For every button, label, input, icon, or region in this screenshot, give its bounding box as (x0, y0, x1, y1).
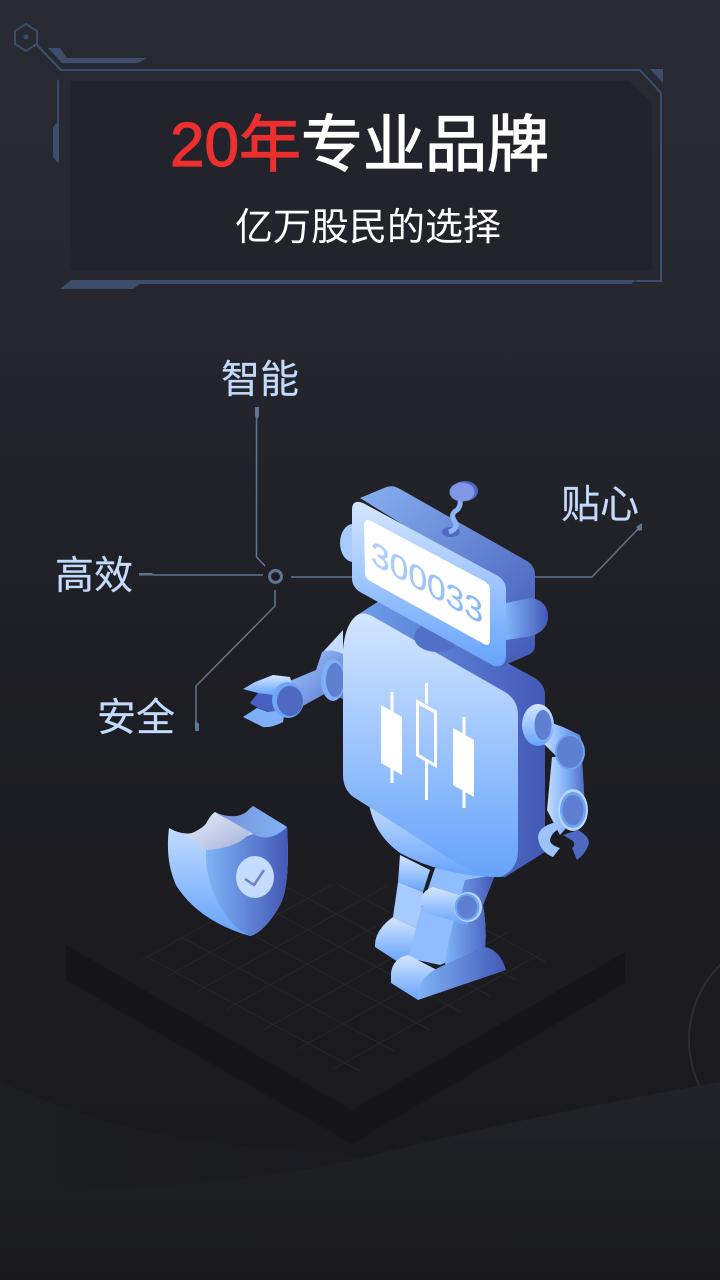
back leg (393, 882, 423, 930)
shield icon (168, 806, 288, 936)
frame corner accents (48, 48, 663, 289)
body side (356, 597, 545, 877)
label: safe: 安全 (97, 697, 175, 740)
shield check badge (236, 856, 274, 898)
neck (414, 622, 460, 652)
connector lines (139, 407, 642, 731)
label: efficient: 高效 (55, 555, 133, 598)
body front (343, 614, 518, 877)
belly (368, 790, 495, 877)
label: intelligent: 智能 (221, 359, 299, 402)
screen number: 300033 (371, 533, 483, 632)
head screen (364, 520, 490, 645)
head front (352, 502, 506, 666)
decorative circle arc (689, 934, 720, 1146)
frame inner panel (70, 81, 652, 270)
subtitle: 亿万股民的选择 (235, 207, 501, 249)
left ear (340, 524, 366, 562)
right arm (522, 704, 589, 860)
label: caring: 贴心 (561, 484, 639, 527)
hexagon icon (15, 24, 37, 51)
platform grid (142, 885, 546, 1071)
legs (375, 855, 506, 1000)
connector hub (270, 570, 282, 582)
title: 20年专业品牌 (170, 111, 549, 180)
antenna (442, 481, 478, 537)
robot (243, 481, 589, 1000)
knee (420, 887, 468, 925)
header frame (15, 24, 663, 289)
isometric platform (80, 885, 546, 1071)
left arm (243, 630, 345, 727)
candlestick chart (381, 683, 474, 808)
frame outline (37, 45, 661, 281)
head side (360, 486, 535, 667)
hill right (0, 1082, 720, 1280)
connector tips (139, 407, 642, 731)
foot (391, 955, 437, 1000)
right ear (506, 598, 548, 640)
hill left (0, 1082, 360, 1280)
front leg (408, 868, 495, 965)
